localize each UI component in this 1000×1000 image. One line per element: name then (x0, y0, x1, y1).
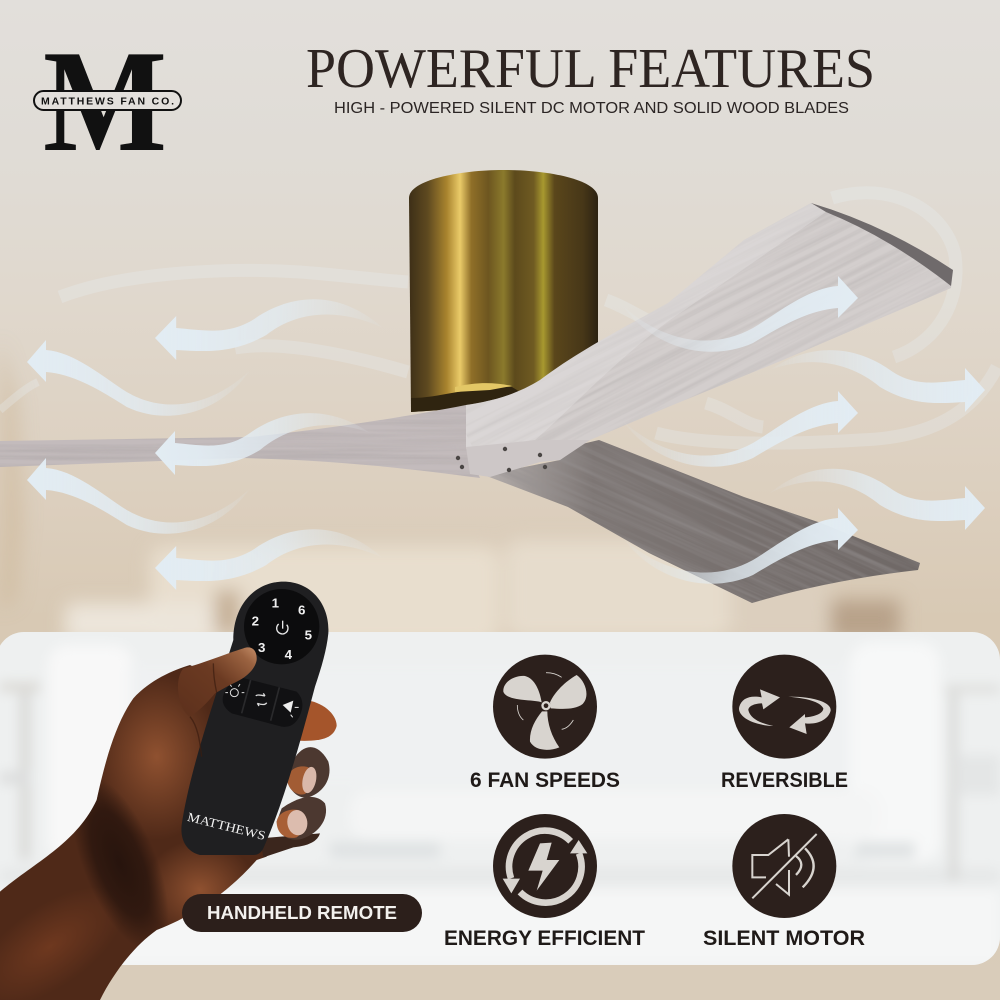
dial numbers (252, 595, 313, 662)
feature: 6 fan speeds (470, 655, 620, 792)
feature: energy efficient (444, 814, 645, 950)
upper right blade (466, 203, 953, 447)
thumb (178, 647, 257, 717)
icon: energy cycle (493, 814, 597, 918)
arrow: right 4 (770, 350, 985, 412)
arrow: right 5 (770, 469, 985, 530)
dial numbers: 4 (285, 647, 293, 662)
arrow: left 5 (27, 458, 250, 534)
logo: M (43, 20, 167, 182)
left blade (0, 405, 480, 478)
hub underside (456, 440, 590, 477)
ring nail (286, 809, 309, 837)
dial numbers: 3 (258, 640, 265, 655)
dial numbers: 2 (252, 614, 259, 629)
arrow: left 2 (155, 413, 370, 475)
dial numbers: 1 (272, 595, 280, 610)
label: handheld remote (182, 894, 422, 932)
airflow arrows (27, 276, 985, 590)
faint air flow lines (0, 193, 997, 443)
arrow: left 1 (155, 299, 383, 360)
hand holding remote (0, 582, 337, 1000)
remote brand: MATTHEWS (186, 810, 267, 843)
feature: reversible (721, 655, 848, 792)
middle finger (287, 747, 330, 798)
feature: silent motor (703, 814, 865, 950)
bottom blade (422, 305, 986, 717)
index finger (297, 700, 337, 741)
ring finger (277, 797, 326, 840)
panel: features background (0, 632, 1000, 965)
icon: fan (493, 655, 597, 759)
label: ENERGY EFFICIENT (444, 927, 645, 950)
motor housing (409, 170, 598, 412)
middle fingertip (287, 766, 312, 795)
icon: reversing arrows (732, 655, 836, 759)
dial numbers: 6 (298, 602, 305, 617)
label: REVERSIBLE (721, 769, 848, 792)
middle nail (300, 766, 319, 794)
power symbol (277, 621, 288, 634)
arrow: right 1 (623, 276, 858, 352)
ceiling fan (0, 50, 1000, 717)
arrow: right 2 (623, 391, 858, 467)
ring fingertip (277, 810, 305, 838)
motor base highlight (455, 383, 512, 392)
little finger (260, 833, 320, 857)
motor base ring (411, 387, 530, 412)
hand and arm (0, 665, 267, 1000)
arrow: left 4 (27, 340, 250, 416)
subtitle: HIGH - POWERED SILENT DC MOTOR AND SOLID WOOD BLADES (334, 100, 849, 117)
logo: MATTHEWS FAN CO. (41, 96, 174, 108)
remote body (181, 582, 328, 855)
title: POWERFUL FEATURES (306, 38, 875, 100)
label: SILENT MOTOR (703, 927, 865, 950)
icon: muted speaker (732, 814, 836, 918)
arrow: right 3 (623, 508, 858, 584)
button row (223, 677, 302, 727)
arrow: left 3 (155, 529, 383, 590)
thumb knuckle crease (190, 663, 217, 757)
dial numbers: 5 (305, 627, 313, 642)
label: handheld remote: HANDHELD REMOTE (207, 902, 397, 923)
dial (244, 589, 319, 664)
label: 6 FAN SPEEDS (470, 769, 620, 792)
